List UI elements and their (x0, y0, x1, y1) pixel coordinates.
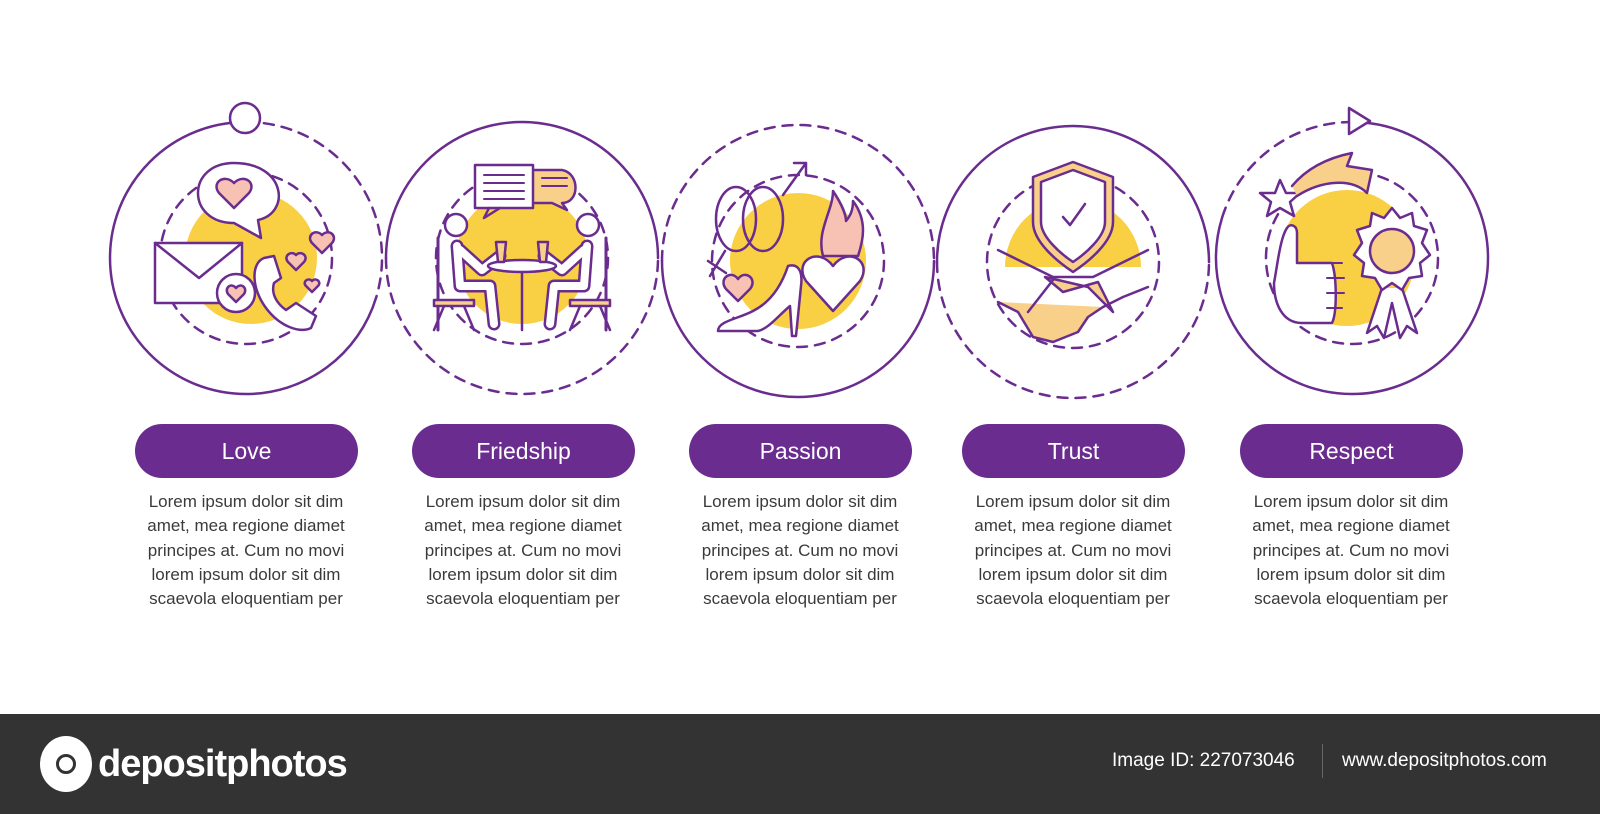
label: Respect (1240, 424, 1463, 478)
text block: Friedship: Lorem ipsum dolor sit dim amet, mea regione diamet principes at. Cum no movi lorem ipsum dolor sit dim scaevola eloquentiam per (424, 492, 622, 608)
icon: speech bubble heart (198, 163, 279, 238)
icon: chat bubbles (475, 165, 576, 218)
text block: Passion: Lorem ipsum dolor sit dim amet, mea regione diamet principes at. Cum no movi lorem ipsum dolor sit dim scaevola eloquentiam per (701, 492, 899, 608)
diagram circles and icons (108, 102, 1490, 400)
label: Trust: Trust (1048, 438, 1099, 464)
step 4: trust (937, 126, 1209, 398)
label: Love (135, 424, 358, 478)
label: Friedship: Friedship (476, 438, 571, 464)
label: Respect: Respect (1309, 438, 1394, 464)
icon: award rosette (1354, 208, 1430, 338)
icon: burning heart (723, 191, 864, 311)
logo (40, 736, 347, 792)
icon: thumbs up (1274, 225, 1344, 323)
label: Trust (962, 424, 1185, 478)
step 2: friendship (386, 122, 658, 394)
step 5: respect (1216, 108, 1488, 394)
text block: Love: Lorem ipsum dolor sit dim amet, mea regione diamet principes at. Cum no movi lorem ipsum dolor sit dim scaevola eloquentiam per (147, 492, 345, 608)
icon: shield (1033, 162, 1113, 272)
step 1: love (110, 103, 382, 394)
label: Passion (689, 424, 912, 478)
label: Friedship (412, 424, 635, 478)
icon: handshake (998, 250, 1148, 342)
footer bar (0, 714, 1600, 814)
icon: high heel (718, 265, 801, 336)
icon: two people at table (434, 214, 610, 330)
icon: rings and gender symbols (708, 163, 806, 276)
logo: depositphotos (98, 742, 347, 784)
icon: phone and hearts (254, 232, 334, 330)
website: www.depositphotos.com (1342, 750, 1547, 771)
text block: Respect: Lorem ipsum dolor sit dim amet, mea regione diamet principes at. Cum no movi lorem ipsum dolor sit dim scaevola eloquentiam per (1252, 492, 1450, 608)
step 3: passion (662, 125, 934, 397)
image id: Image ID: 227073046 (1112, 750, 1295, 771)
text block: Trust: Lorem ipsum dolor sit dim amet, mea regione diamet principes at. Cum no movi lorem ipsum dolor sit dim scaevola eloquentiam per (974, 492, 1172, 608)
icon: shooting star (1260, 153, 1372, 216)
label: Love: Love (222, 438, 271, 464)
icon: envelope (155, 243, 255, 312)
label: Passion: Passion (760, 438, 841, 464)
